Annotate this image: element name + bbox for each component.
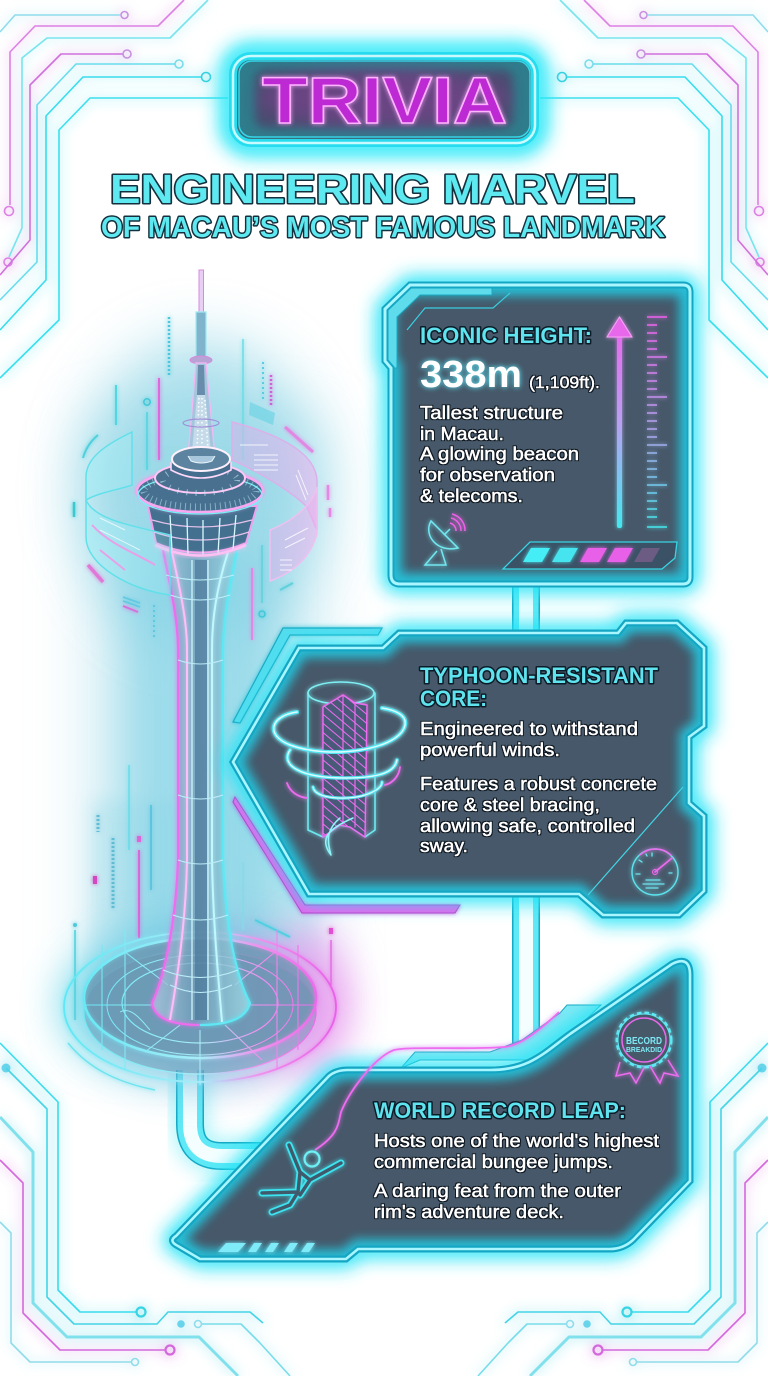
panel body text: A daring feat from the outer — [374, 1181, 621, 1201]
panel body text: & telecoms. — [420, 486, 523, 506]
tower spire — [183, 270, 219, 457]
panel body text: commercial bungee jumps. — [374, 1152, 613, 1172]
heading line two: OF MACAU’S MOST FAMOUS LANDMARK — [101, 212, 665, 244]
panel: typhoon-resistant core — [233, 623, 704, 915]
icon: record badge: BECORD — [626, 1035, 662, 1047]
bungee cord — [315, 1012, 559, 1150]
panel body text: in Macau. — [420, 424, 504, 444]
holographic ring: front panels — [86, 487, 317, 595]
heading line one: ENGINEERING MARVEL — [110, 166, 635, 212]
icon: satellite dish — [425, 514, 465, 565]
icon: wind speed gauge — [632, 849, 678, 895]
title text: TRIVIA — [262, 63, 507, 137]
height in feet: (1,109ft). — [529, 373, 600, 392]
height arrow — [607, 317, 632, 528]
panel body text — [420, 403, 579, 506]
panel body text — [374, 1131, 659, 1222]
height scale — [647, 317, 667, 527]
icon: record badge: BREAKDID — [626, 1045, 663, 1054]
tower shaft — [152, 550, 250, 1025]
panel body text: sway. — [420, 836, 468, 856]
title badge — [229, 52, 539, 147]
connector pipes — [190, 585, 526, 1156]
panel body text: Features a robust concrete — [420, 774, 657, 794]
data lines — [68, 317, 331, 1090]
accent band: magenta — [233, 797, 460, 913]
accent band: cyan — [233, 628, 382, 723]
panel: world record leap — [172, 961, 690, 1259]
panel body text: A glowing beacon — [420, 444, 579, 464]
tower glow — [60, 340, 350, 1085]
panel heading: TYPHOON-RESISTANT — [420, 663, 659, 688]
circuit lines: top left — [0, 0, 228, 378]
circuit lines: bottom right — [478, 1043, 768, 1376]
holographic ring: back panels — [86, 402, 317, 530]
progress bar — [503, 542, 677, 569]
panel body text: allowing safe, controlled — [420, 816, 635, 836]
tower observation pod — [137, 447, 263, 556]
panel heading: CORE: — [420, 686, 487, 711]
panel body text: Hosts one of the world's highest — [374, 1131, 659, 1151]
panel body text: rim's adventure deck. — [374, 1202, 564, 1222]
panel body text: Tallest structure — [420, 403, 563, 423]
icon: tornado around core — [274, 682, 405, 855]
tower illustration — [60, 270, 350, 1090]
panel: iconic height — [383, 282, 690, 584]
decorative bar segments — [218, 1243, 315, 1252]
panel heading: ICONIC HEIGHT: — [420, 323, 592, 348]
accent tab — [401, 1005, 601, 1068]
circuit lines: bottom left — [0, 1043, 290, 1376]
icon: record badge — [616, 1013, 678, 1083]
panel body text: for observation — [420, 465, 555, 485]
panel body text: powerful winds. — [420, 740, 560, 760]
panel body text: Engineered to withstand — [420, 719, 638, 739]
height value: 338m — [420, 354, 522, 396]
tower base disc — [64, 930, 336, 1085]
panel body text — [420, 719, 657, 856]
heading — [101, 166, 665, 244]
panel body text: core & steel bracing, — [420, 795, 600, 815]
panel heading — [420, 663, 659, 711]
panel heading: WORLD RECORD LEAP: — [374, 1098, 626, 1123]
circuit lines: top right — [540, 0, 768, 378]
icon: bungee jumper — [262, 1145, 341, 1212]
